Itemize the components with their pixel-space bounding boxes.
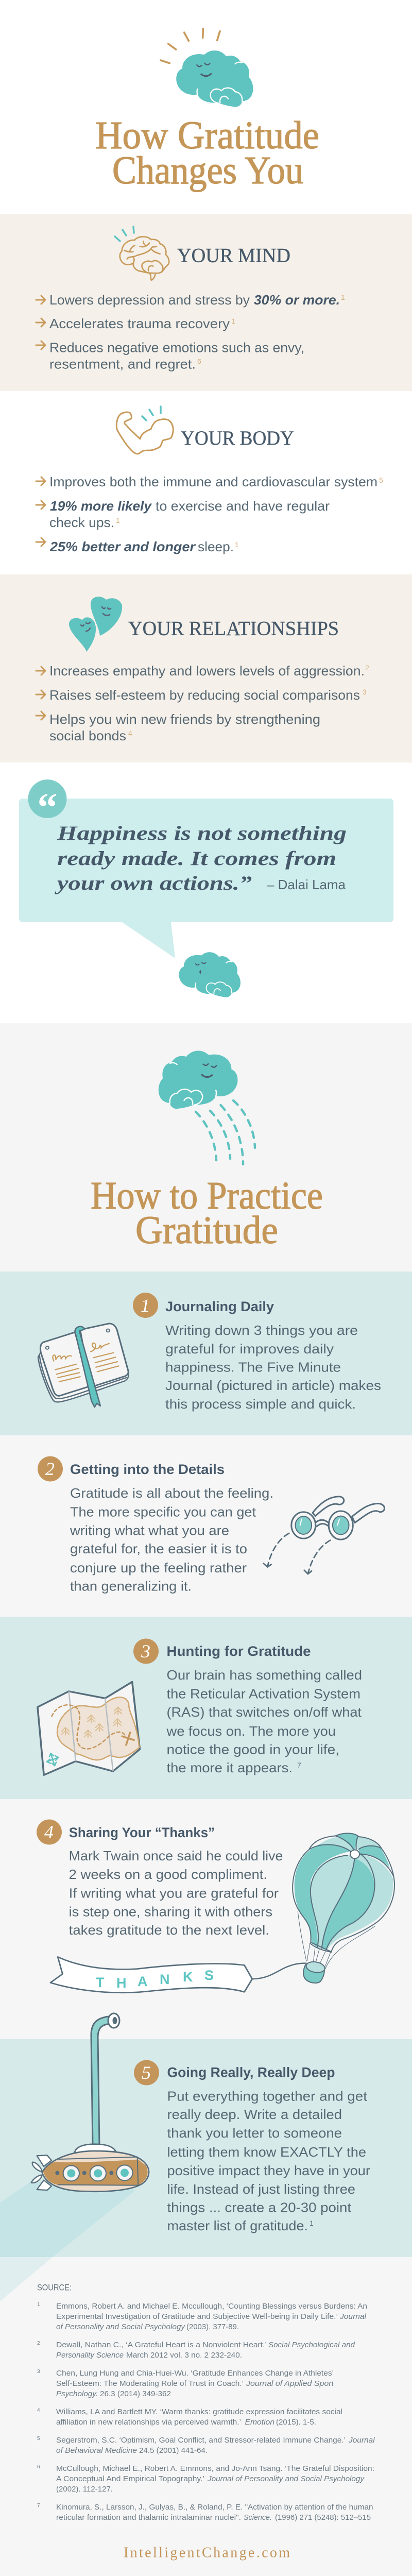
reference 7: Science. [244,2513,272,2522]
heading: your mind: YOUR MIND [177,244,290,267]
reference 2: Personality Science [56,2351,124,2360]
reference 1: Journal [339,2312,367,2321]
relationships bullet list [36,663,369,743]
reference 2: Social Psychological and [268,2341,355,2349]
quote text [55,822,347,894]
body bullet list [36,474,383,554]
relationships bullet list: Raises self-esteem by reducing social comparisons [49,687,360,703]
reference 1: of Personality and Social Psychology [56,2323,186,2331]
quote text: ready made. It comes from [57,848,336,870]
step 5 text: Put everything together and get [167,2089,368,2104]
mind bullet list: Accelerates trauma recovery [49,316,230,331]
mind bullet list: 1 [341,293,345,301]
reference 6: 6 [37,2464,40,2470]
step 5 text: things ... create a 20-30 point [167,2200,352,2215]
reference 7: Kinomura, S., Larsson, J., Gulyas, B., & Roland, P. E. "Activation by attention of the human [56,2503,373,2512]
reference 3: Self-Esteem: The Moderating Role of Trust in Coach.’ [56,2379,244,2388]
reference 3: 26.3 (2014) 349-362 [100,2389,171,2398]
title: how to practice gratitude [91,1174,323,1252]
step 2 heading: Getting into the Details [70,1462,225,1477]
step 3 text: we focus on. The more you [166,1723,336,1739]
number badge 5: 5 [142,2062,151,2083]
reference 4: Emotion [245,2418,274,2427]
icon: thanks banner: THANKS [96,1968,214,1991]
step 1 heading: Journaling Daily [165,1299,274,1314]
reference 1: Emmons, Robert A. and Michael E. Mccullough, ‘Counting Blessings versus Burdens: An [56,2302,367,2311]
step 3 text [166,1667,362,1775]
body bullet list: check ups. [49,515,114,530]
number badge 2: 2 [45,1459,55,1479]
reference 2: March 2012 vol. 3 no. 2 232-240. [126,2351,242,2360]
reference 5: Segerstrom, S.C. ‘Optimism, Goal Conflict, and Stressor-related Immune Change.’ [56,2436,346,2445]
reference 2: 2 [37,2341,40,2346]
icon: two hearts [69,597,122,652]
panel: quote speech bubble [19,779,393,958]
reference 3: Psychology. [56,2389,98,2398]
step 4 text [69,1848,283,1938]
mind bullet list: Reduces negative emotions such as envy, [49,340,304,355]
reference 3: 3 [37,2369,40,2375]
body bullet list: 25% better and longer [49,539,196,554]
step 2 text [70,1485,273,1594]
title: How Gratitude [95,114,319,157]
number badge 3: 3 [141,1641,150,1662]
number badge 1: 1 [141,1295,150,1316]
quote text: Happiness is not something [57,822,347,844]
reference 5: 5 [37,2436,40,2442]
icon: speaking brain [179,952,241,997]
reference 3: Chen, Lung Hung and Chia-Huei-Wu. ‘Gratitude Enhances Change in Athletes’ [56,2369,334,2378]
reference 4: affiliation in new relationships via perceived warmth.’ [56,2418,241,2427]
relationships bullet list: Increases empathy and lowers levels of aggression. [49,663,365,679]
icon: quote badge: “ [37,785,58,829]
number badge 5 [134,2060,159,2086]
number badge 2 [38,1456,63,1482]
reference 1: 1 [37,2302,40,2308]
step 2 text: The more specific you can get [70,1504,256,1520]
reference 1: (2003). 377-89. [186,2323,239,2331]
title: Changes You [112,149,303,192]
step 3 text: the Reticular Activation System [167,1686,360,1701]
step 5 text: thank you letter to someone [167,2125,342,2141]
icon: brain with rain [159,1050,255,1164]
step 5 text: 1 [310,2219,314,2227]
step 4 heading: Sharing Your “Thanks” [69,1825,215,1840]
reference 6: A Conceptual And Empirical Topography.’ [56,2475,204,2483]
reference 4: 4 [37,2408,40,2413]
step 4 text: Mark Twain once said he could live [69,1848,283,1863]
reference 5: 24.5 (2001) 441-64. [139,2446,208,2455]
panel: your body [36,406,383,554]
title [95,114,319,192]
step 1 text: happiness. The Five Minute [165,1360,341,1375]
source heading: SOURCE: [37,2282,72,2293]
icon: quote badge [28,779,67,829]
reference 7: reticular formation and thalamic intralaminar nuclei". [56,2513,241,2522]
body bullet list: 19% more likely [50,498,152,514]
step 5 text: positive impact they have in your [167,2163,370,2178]
step 2 text: grateful for, the easier it is to [70,1541,247,1556]
step 4 text: is step one, sharing it with others [69,1904,272,1920]
step 1 text: this process simple and quick. [165,1396,356,1412]
step 5 text: life. Instead of just listing three [167,2181,355,2197]
panel: step 1 journaling daily [0,1272,412,1435]
step 4 text: 2 weeks on a good compliment. [69,1867,267,1882]
relationships bullet list: social bonds [49,728,126,743]
reference 6 [37,2464,374,2494]
step 2 text: than generalizing it. [70,1579,192,1594]
panel: sources [0,2257,412,2576]
icon: treasure map [38,1682,140,1775]
reference 6: McCullough, Michael E., Robert A. Emmons, and Jo-Ann Tsang. ‘The Grateful Disposition: [56,2464,374,2473]
step 5 text: really deep. Write a detailed [167,2107,342,2122]
step 3 text: 7 [297,1761,301,1769]
reference 3 [37,2369,334,2398]
icon: hot air balloon [293,1833,394,1983]
mind bullet list: 1 [231,317,235,325]
step 2 text: conjure up the feeling rather [70,1560,247,1575]
reference 4: (2015). 1-5. [276,2418,316,2427]
footer url: IntelligentChange.com [124,2545,290,2561]
relationships bullet list: 2 [365,664,369,672]
icon: smiling brain with sun rays [161,29,253,107]
mind bullet list [36,292,345,372]
reference 6: (2002). 112-127. [56,2485,113,2494]
step 1 text [165,1323,381,1412]
body bullet list: 5 [379,476,383,484]
title: how to practice gratitude: Gratitude [135,1209,278,1252]
icon: glasses with dashed arrows [264,1497,385,1574]
heading: your body: YOUR BODY [181,427,294,449]
sonar light beam [0,2181,136,2257]
mind bullet list: Lowers depression and stress by [49,292,250,308]
mind bullet list: 30% or more. [254,292,340,308]
relationships bullet list: 4 [128,729,132,737]
number badge 3 [133,1638,159,1664]
panel: step 5 going really deep [0,2039,412,2257]
relationships bullet list: Helps you win new friends by strengthening [49,711,320,727]
body bullet list: 1 [235,540,239,549]
step 3 text: notice the good in your life, [167,1742,339,1757]
panel: your mind [0,214,412,391]
reference 2 [37,2341,355,2360]
step 4 text: If writing what you are grateful for [69,1886,279,1901]
mind bullet list: resentment, and regret. [49,357,196,372]
step 1 text: grateful for improves daily [165,1341,334,1357]
step 4 text: takes gratitude to the next level. [69,1922,269,1938]
number badge 1 [133,1293,158,1318]
body bullet list: sleep. [198,539,234,554]
body bullet list: Improves both the immune and cardiovascular system [49,474,377,489]
mind bullet list: 6 [197,357,201,365]
step 3 text: (RAS) that switches on/off what [167,1704,362,1720]
reference 1 [37,2302,367,2331]
reference 5: Journal [348,2436,375,2445]
reference 4 [37,2408,342,2427]
step 5 text: letting them know EXACTLY the [167,2144,366,2160]
step 5 text [167,2089,370,2233]
number badge 4: 4 [44,1822,54,1842]
reference 5 [37,2436,375,2455]
reference 7: (1996) 271 (5248): 512–515 [275,2513,371,2522]
reference 1: Experimental Investigation of Gratitude and Subjective Well-being in Daily Life.’ [56,2312,338,2321]
icon: outlined brain [115,227,169,280]
reference 7 [37,2503,373,2522]
reference 7: 7 [37,2503,40,2509]
heading: your relationships: YOUR RELATIONSHIPS [128,618,339,640]
step 3 text: the more it appears. [167,1760,293,1775]
step 5 text: master list of gratitude. [167,2218,308,2233]
icon: submarine with periscope [31,2013,149,2192]
reference 5: of Behavioral Medicine [56,2446,137,2455]
icon: open journal [38,1324,128,1407]
step 3 heading: Hunting for Gratitude [167,1643,311,1659]
body bullet list: to exercise and have regular [156,498,330,514]
icon: thanks banner [50,1957,306,1993]
quote text: – Dalai Lama [267,877,346,892]
panel: how to practice gratitude [0,1023,412,1272]
quote text: your own actions.” [55,872,252,894]
reference 2: Dewall, Nathan C., ‘A Grateful Heart is a Nonviolent Heart.’ [56,2341,267,2349]
sonar light beam tail [0,2257,53,2301]
step 1 text: Journal (pictured in article) makes [165,1378,381,1393]
reference 4: Williams, LA and Bartlett MY. ‘Warm thanks: gratitude expression facilitates social [56,2408,342,2416]
step 5 heading: Going Really, Really Deep [167,2065,335,2080]
panel: step 4 sharing your thanks [0,1799,412,2039]
reference 6: Journal of Personality and Social Psychology [207,2475,365,2483]
body bullet list: 1 [116,516,120,524]
step 2 text: writing what what you are [70,1523,229,1538]
step 3 text: Our brain has something called [167,1667,362,1683]
reference 3: Journal of Applied Sport [246,2379,334,2388]
step 2 text: Gratitude is all about the feeling. [70,1485,273,1501]
panel: step 3 hunting for gratitude [0,1617,412,1799]
title: how to practice gratitude: How to Practice [91,1174,323,1217]
panel: step 2 getting into the details [0,1435,412,1617]
panel: your relationships [0,574,412,762]
step 1 text: Writing down 3 things you are [165,1323,358,1338]
number badge 4 [37,1820,62,1844]
icon: flexed arm [116,406,173,454]
relationships bullet list: 3 [363,688,367,696]
